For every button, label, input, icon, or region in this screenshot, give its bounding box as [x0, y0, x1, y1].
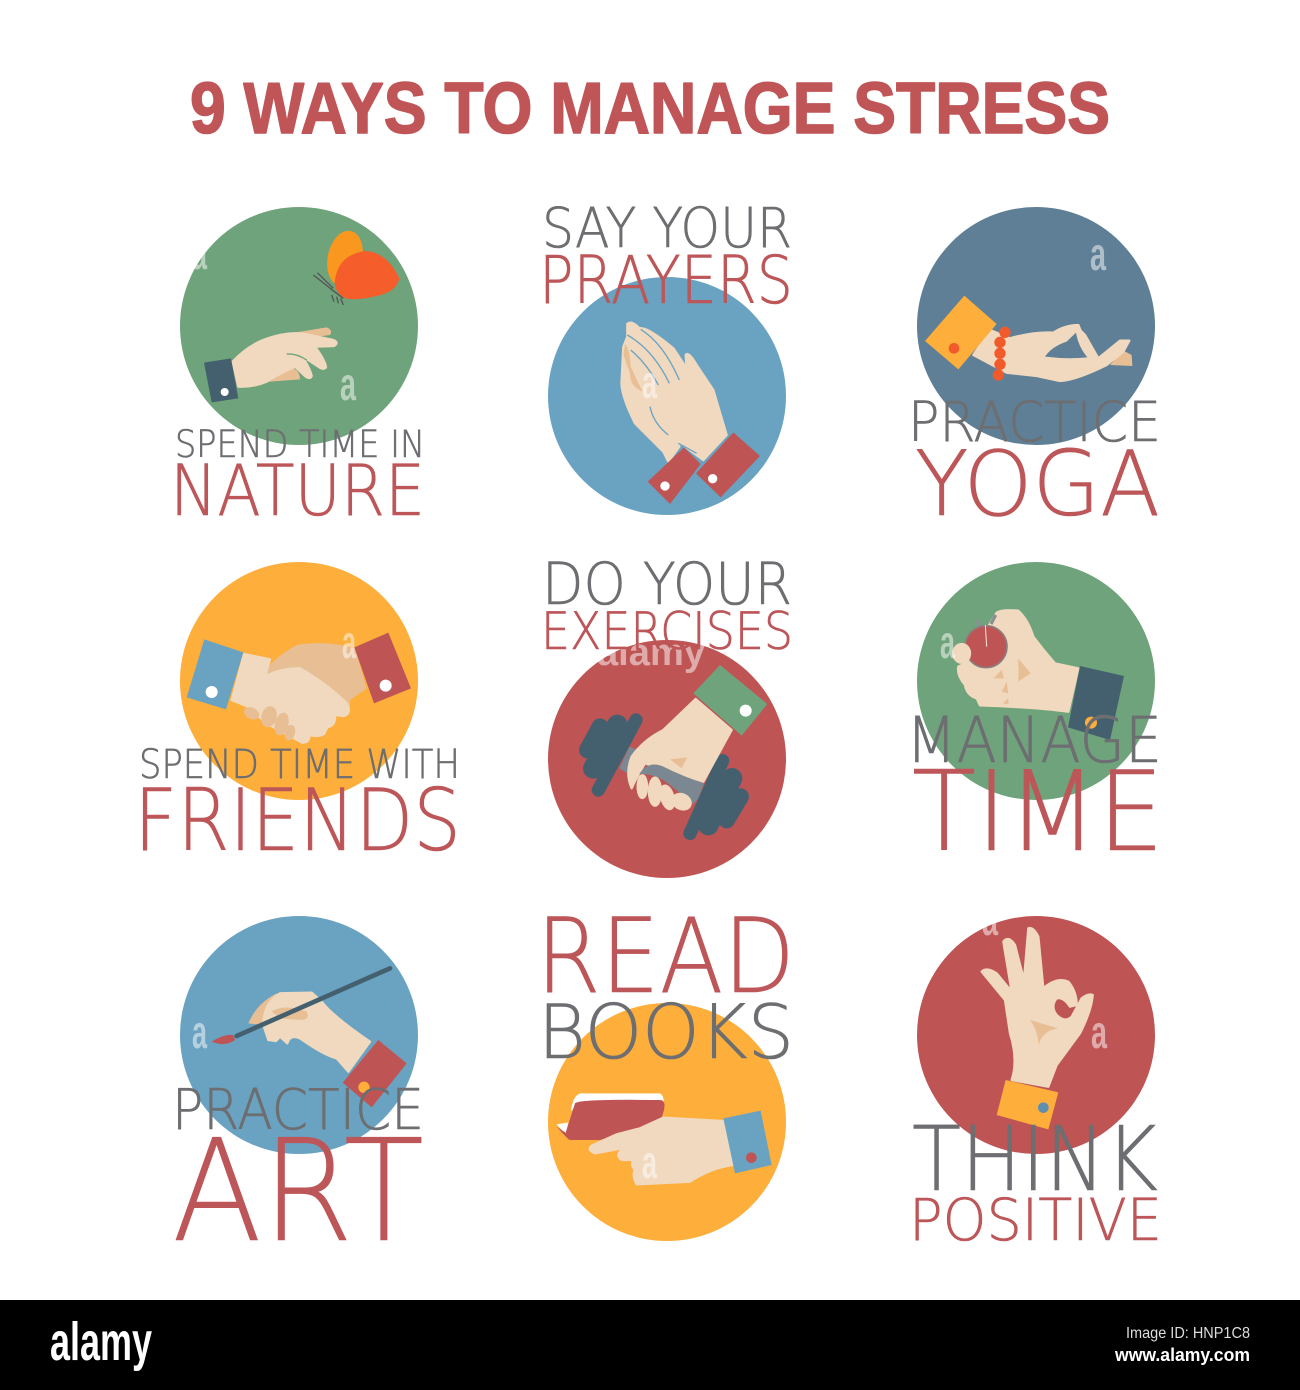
- text: practice (art): PRACTICE: [172, 1078, 424, 1143]
- watermark marks: a: [342, 616, 356, 668]
- icon: yoga mudra hand: [925, 296, 1132, 381]
- watermark marks: a: [192, 1006, 207, 1058]
- circle: yoga: [917, 207, 1155, 445]
- watermark marks: a: [982, 893, 998, 945]
- circle: manage time: [917, 562, 1155, 800]
- panel: say your prayers: [548, 277, 786, 515]
- text: do your: DO YOUR: [542, 550, 792, 618]
- text: time: TIME: [912, 748, 1164, 877]
- panel: spend time in nature: [180, 207, 418, 445]
- text: read: READ: [536, 897, 795, 1017]
- watermark marks: a: [940, 616, 955, 668]
- icon: hand and butterfly: [204, 227, 399, 402]
- watermark marks: a: [192, 227, 207, 279]
- text: books: BOOKS: [538, 988, 794, 1076]
- title: 9 WAYS TO MANAGE STRESS: [190, 69, 1110, 149]
- circle: art: [180, 916, 418, 1154]
- text: practice (yoga): PRACTICE: [908, 390, 1161, 454]
- watermark marks: a: [642, 356, 657, 408]
- image id: Image ID: HNP1C8: [1126, 1325, 1250, 1342]
- text: think: THINK: [912, 1107, 1158, 1211]
- circle: books: [548, 1003, 786, 1241]
- circle: exercises: [548, 640, 786, 878]
- circle: prayers: [548, 277, 786, 515]
- text: spend time in: SPEND TIME IN: [175, 423, 425, 466]
- icon: hand with stopwatch: [953, 610, 1124, 740]
- text: say your: SAY YOUR: [542, 196, 792, 260]
- panel: manage time: [917, 562, 1155, 800]
- footer bar: [0, 1300, 1300, 1390]
- panel: practice art: [180, 916, 418, 1154]
- text: friends: FRIENDS: [134, 771, 461, 871]
- text: exercises: EXERCISES: [541, 602, 793, 662]
- icon: handshake: [187, 633, 411, 743]
- watermark marks: a: [1090, 228, 1106, 280]
- text: spend time with: SPEND TIME WITH: [139, 742, 460, 788]
- text: positive: POSITIVE: [909, 1186, 1162, 1254]
- watermark marks: alamy: [597, 632, 705, 674]
- icon: OK hand gesture: [982, 928, 1093, 1129]
- panel: think positive: [917, 916, 1155, 1154]
- watermark marks: a: [642, 1136, 657, 1188]
- text: manage: MANAGE: [906, 704, 1162, 777]
- icon: hand holding book: [557, 1093, 772, 1184]
- text: nature: NATURE: [170, 450, 425, 532]
- watermark marks: a: [340, 358, 356, 410]
- panel: spend time with friends: [180, 562, 418, 800]
- watermark marks: [192, 227, 1107, 1188]
- text: yoga: YOGA: [915, 432, 1160, 537]
- watermark marks: a: [1091, 1006, 1107, 1058]
- icon: hand with dumbbell: [587, 665, 767, 833]
- circle: positive: [917, 916, 1155, 1154]
- website: www.alamy.com: [1114, 1345, 1250, 1365]
- icon: praying hands: [621, 323, 760, 504]
- circle: nature: [180, 207, 418, 445]
- text: prayers: PRAYERS: [539, 242, 793, 319]
- panel: do your exercises: [548, 640, 786, 878]
- text: art: ART: [172, 1110, 424, 1274]
- panel: read books: [548, 1003, 786, 1241]
- panel: practice yoga: [917, 207, 1155, 445]
- icon: hand with paintbrush: [212, 968, 407, 1107]
- footer logo: alamy: [50, 1312, 152, 1372]
- circle: friends: [180, 562, 418, 800]
